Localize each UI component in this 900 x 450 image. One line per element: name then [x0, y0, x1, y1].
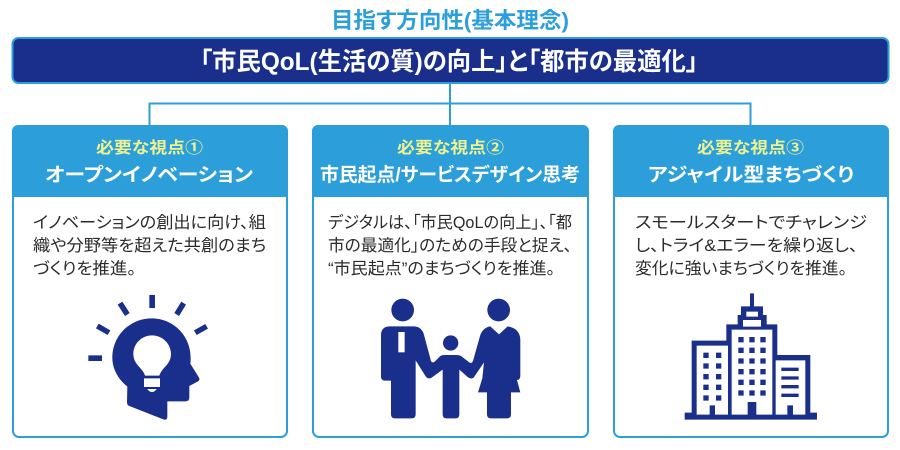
description 3: 変化に強いまちづくりを推進。	[635, 259, 847, 278]
icon: city buildings	[685, 293, 817, 420]
connector lines	[150, 84, 750, 125]
icon: head with light bulb	[88, 295, 208, 420]
viewpoint label 3: 必要な視点③	[697, 138, 804, 157]
viewpoint heading 3: アジャイル型まちづくり	[648, 164, 854, 186]
icon: family of three	[381, 299, 520, 418]
description 2: デジタルは、「市民QoLの向上」、「都	[328, 212, 572, 232]
description 1	[33, 213, 266, 278]
banner: basic philosophy	[12, 38, 888, 83]
description 2: “市民起点”のまちづくりを推進。	[328, 259, 555, 278]
viewpoint label 1: 必要な視点①	[96, 138, 203, 157]
banner: basic philosophy: 「市民QoL(生活の質)の向上」と「都市の最適化」	[200, 48, 698, 76]
viewpoint heading 2: 市民起点/サービスデザイン思考	[320, 163, 580, 186]
description 3	[635, 213, 867, 278]
description 2: 市の最適化」のための手段と捉え、	[328, 236, 572, 255]
description 2	[328, 212, 572, 278]
viewpoint heading 1: オープンイノベーション	[45, 164, 253, 186]
description 1: づくりを推進。	[33, 259, 136, 278]
description 3: スモールスタートでチャレンジ	[635, 213, 867, 232]
panel: agile urban development	[613, 125, 889, 437]
viewpoint label 2: 必要な視点②	[397, 138, 504, 157]
panel: open innovation	[12, 125, 288, 437]
panel: citizen-centered and service design thinking	[312, 125, 589, 437]
description 1: 織や分野等を超えた共創のまち	[33, 236, 266, 255]
description 1: イノベーションの創出に向け、組	[33, 213, 266, 232]
title: 目指す方向性(基本理念)	[331, 8, 569, 33]
description 3: し、トライ&エラーを繰り返し、	[635, 236, 858, 255]
